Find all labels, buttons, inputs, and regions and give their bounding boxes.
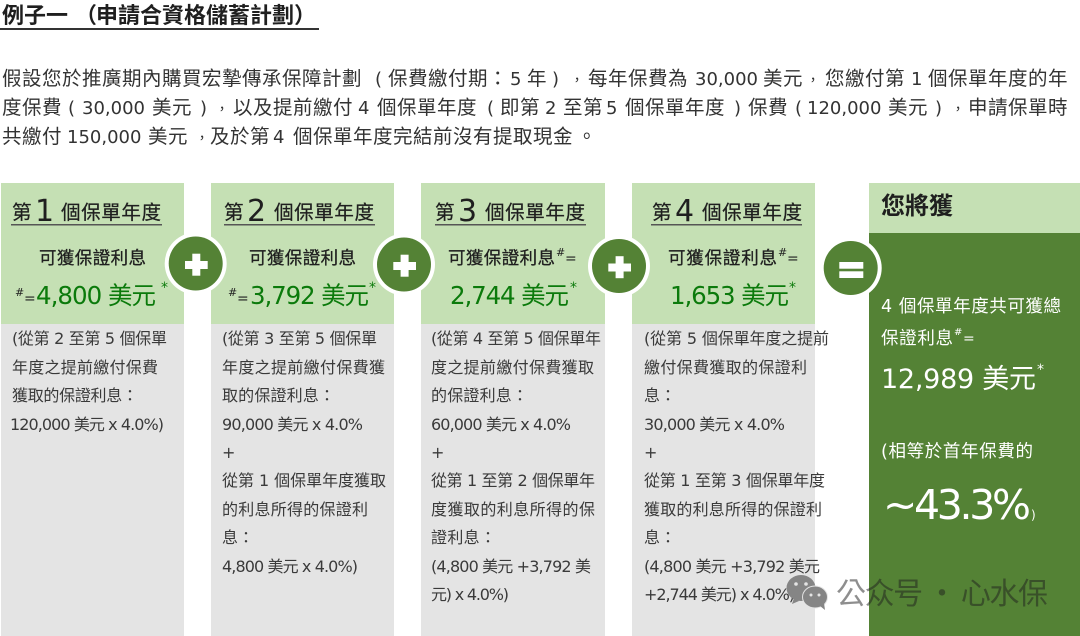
detail text: year 3: 60,000 美元 x 4.0% — [431, 415, 571, 434]
amount: 2,744: 2,744 美元 — [450, 281, 569, 310]
detail text: year 3: + — [431, 443, 444, 462]
total amount: 12,989 美元 — [881, 364, 1036, 395]
detail text: year 1 — [10, 329, 167, 434]
amount: 4,800: 4,800 美元 — [36, 281, 156, 310]
intro paragraph: ( — [375, 69, 382, 90]
amount: 4,800: # — [15, 286, 24, 299]
intro paragraph: ) — [200, 98, 207, 119]
panel: year 4 — [632, 183, 829, 636]
label: guaranteed interest: = — [565, 251, 577, 267]
intro paragraph: 。 — [577, 125, 597, 148]
intro paragraph: ( — [68, 98, 75, 119]
intro paragraph: ) — [552, 69, 559, 90]
label: guaranteed interest: 可獲保證利息 — [448, 249, 555, 269]
heading: year 2: 個保單年度 — [274, 201, 374, 224]
intro paragraph: ， — [806, 73, 820, 89]
intro paragraph: 至第 — [563, 96, 603, 119]
intro paragraph: ： — [488, 67, 508, 90]
heading: you will get: 您將獲 — [881, 186, 953, 221]
icon: plus 2 — [373, 234, 435, 296]
amount: 3,792: * — [369, 280, 376, 296]
label: guaranteed interest: 可獲保證利息 — [249, 249, 356, 269]
panel: year 1 — [1, 183, 184, 636]
detail text: year 2: 從第 1 個保單年度獲取 — [222, 471, 386, 490]
heading: year 2: 2 — [247, 194, 266, 229]
detail text: year 4: (從第 5 個保單年度之提前 — [644, 329, 829, 348]
intro paragraph: 個保單年度完結前沒有提取現金 — [293, 125, 573, 148]
intro paragraph: 2 — [545, 98, 556, 119]
total description: = — [963, 331, 975, 347]
detail text: year 2: + — [222, 443, 235, 462]
heading: year 2: 第 — [224, 201, 244, 224]
detail text: year 1: 獲取的保證利息： — [12, 386, 138, 405]
detail text: year 4 — [644, 329, 829, 604]
amount: 4,800: * — [161, 280, 168, 296]
icon: plus 3 — [588, 235, 650, 297]
amount: 2,744: * — [570, 280, 577, 296]
intro paragraph: 美元 — [763, 67, 803, 90]
detail text: year 4: 息： — [644, 386, 676, 405]
total description: 保證利息 — [881, 329, 953, 349]
intro paragraph: 保費繳付期 — [388, 67, 488, 90]
detail text: year 2: 年度之提前繳付保費獲 — [222, 358, 385, 377]
intro paragraph: 美元 — [888, 96, 928, 119]
heading: year 2 — [224, 194, 375, 229]
heading: year 1 — [11, 194, 162, 229]
detail text: year 2: (從第 3 至第 5 個保單 — [222, 329, 377, 348]
detail text: year 2: 息： — [222, 528, 254, 547]
equivalent note: (相等於首年保費的 — [881, 442, 1033, 462]
percentage: ) — [1031, 508, 1036, 522]
label: guaranteed interest: 可獲保證利息 — [39, 249, 146, 269]
intro paragraph: 4 — [273, 127, 284, 148]
heading: year 1: 1 — [35, 194, 54, 229]
detail text: year 2: 90,000 美元 x 4.0% — [222, 415, 363, 434]
amount: 4,800: = — [24, 291, 36, 307]
intro paragraph: ， — [570, 73, 584, 89]
amount: 1,653: * — [789, 280, 796, 296]
detail text: year 4: 從第 1 至第 3 個保單年度 — [644, 471, 825, 490]
heading: year 3: 第 — [435, 201, 455, 224]
intro paragraph: ) — [734, 98, 741, 119]
panel: total — [869, 183, 1080, 636]
intro paragraph: 美元 — [148, 125, 188, 148]
title — [0, 0, 319, 30]
intro paragraph: 4 — [358, 98, 369, 119]
detail text: year 2: 4,800 美元 x 4.0%) — [222, 557, 358, 576]
detail text: year 3: 度之提前繳付保費獲取 — [431, 358, 594, 377]
intro paragraph: 5 — [606, 98, 617, 119]
intro paragraph: 1 — [911, 69, 922, 90]
detail text: year 3: 證利息： — [431, 528, 496, 547]
intro paragraph: 以及提前繳付 — [233, 96, 353, 119]
intro paragraph — [2, 67, 1068, 148]
heading: year 3 — [435, 194, 586, 229]
panel: year 3 — [421, 183, 605, 636]
intro paragraph: 假設您於推廣期內購買宏摯傳承保障計劃 — [2, 67, 362, 90]
icon: plus 1 — [165, 232, 227, 294]
intro paragraph: ( — [487, 98, 494, 119]
intro paragraph: ， — [951, 102, 965, 118]
amount: 3,792: # — [228, 286, 237, 299]
detail text: year 3 — [431, 329, 601, 604]
heading: year 3: 3 — [458, 194, 477, 229]
intro paragraph: ) — [935, 98, 942, 119]
watermark — [786, 569, 1048, 613]
heading: year 1: 第 — [12, 201, 32, 224]
detail text: year 3: 度獲取的利息所得的保 — [431, 500, 595, 519]
heading: year 1: 個保單年度 — [61, 201, 161, 224]
total description: # — [954, 327, 962, 338]
intro paragraph: 年 — [527, 67, 547, 90]
label: guaranteed interest: 可獲保證利息 — [668, 249, 777, 269]
intro paragraph: 個保單年度的年 — [928, 67, 1068, 90]
total description: 4 個保單年度共可獲總 — [881, 297, 1061, 317]
detail text: year 4: 繳付保費獲取的保證利 — [644, 358, 807, 377]
detail text: year 4: +2,744 美元) x 4.0%) — [644, 585, 795, 604]
heading: year 4: 4 — [675, 194, 694, 229]
intro paragraph: ， — [215, 102, 229, 118]
panel: year 2 — [211, 183, 394, 636]
icon: equals — [820, 237, 882, 299]
detail text: year 2 — [222, 329, 386, 576]
watermark text: 公众号 · 心水保 — [836, 569, 1048, 613]
detail text: year 4: (4,800 美元 +3,792 美元 — [644, 557, 820, 576]
detail text: year 1: 年度之提前繳付保費 — [12, 358, 158, 377]
amount: 1,653: 1,653 美元 — [670, 281, 789, 310]
detail text: year 4: 30,000 美元 x 4.0% — [644, 415, 785, 434]
intro paragraph: 您繳付第 — [825, 67, 905, 90]
heading: year 4: 個保單年度 — [702, 201, 802, 224]
intro paragraph: 個保單年度 — [377, 96, 477, 119]
amount: 3,792: = — [237, 291, 249, 307]
intro paragraph: 美元 — [152, 96, 192, 119]
icon: wechat — [786, 575, 828, 610]
detail text: year 1: (從第 2 至第 5 個保單 — [12, 329, 167, 348]
detail text: year 3: 的保證利息： — [431, 386, 528, 405]
intro paragraph: 申請保單時 — [968, 96, 1068, 119]
detail text: year 2: 取的保證利息： — [222, 386, 335, 405]
amount: 3,792: 3,792 美元 — [250, 281, 369, 310]
intro paragraph: 個保單年度 — [625, 96, 725, 119]
detail text: year 4: 獲取的利息所得的保證利 — [644, 500, 822, 519]
percentage: ~43.3% — [883, 481, 1031, 529]
heading: year 4 — [651, 194, 802, 229]
intro paragraph: 150,000 — [67, 127, 141, 148]
detail text: year 3: 從第 1 至第 2 個保單年 — [431, 471, 595, 490]
label: guaranteed interest: # — [556, 246, 565, 259]
total amount: * — [1037, 362, 1044, 378]
intro paragraph: 度保費 — [2, 96, 62, 119]
intro paragraph: 5 — [510, 69, 521, 90]
intro paragraph: 保費 — [748, 96, 788, 119]
detail text: year 3: (從第 4 至第 5 個保單年 — [431, 329, 601, 348]
heading: year 4: 第 — [652, 201, 672, 224]
intro paragraph: ， — [195, 131, 209, 147]
label: guaranteed interest: = — [787, 251, 799, 267]
label: guaranteed interest: # — [778, 246, 787, 259]
intro paragraph: 30,000 — [82, 98, 145, 119]
intro paragraph: 及於第 — [210, 125, 270, 148]
total description — [881, 297, 1061, 349]
intro paragraph: 即第 — [500, 96, 540, 119]
detail text: year 4: 息： — [644, 528, 676, 547]
intro paragraph: 120,000 — [807, 98, 881, 119]
heading: year 3: 個保單年度 — [485, 201, 585, 224]
detail text: year 1: 120,000 美元 x 4.0%) — [10, 415, 164, 434]
intro paragraph: 30,000 — [695, 69, 758, 90]
detail text: year 3: 元) x 4.0%) — [431, 585, 509, 604]
intro paragraph: 共繳付 — [2, 125, 62, 148]
detail text: year 2: 的利息所得的保證利 — [222, 500, 368, 519]
intro paragraph: 每年保費為 — [588, 67, 688, 90]
detail text: year 3: (4,800 美元 +3,792 美 — [431, 557, 591, 576]
intro paragraph: ( — [795, 98, 802, 119]
detail text: year 4: + — [644, 443, 657, 462]
